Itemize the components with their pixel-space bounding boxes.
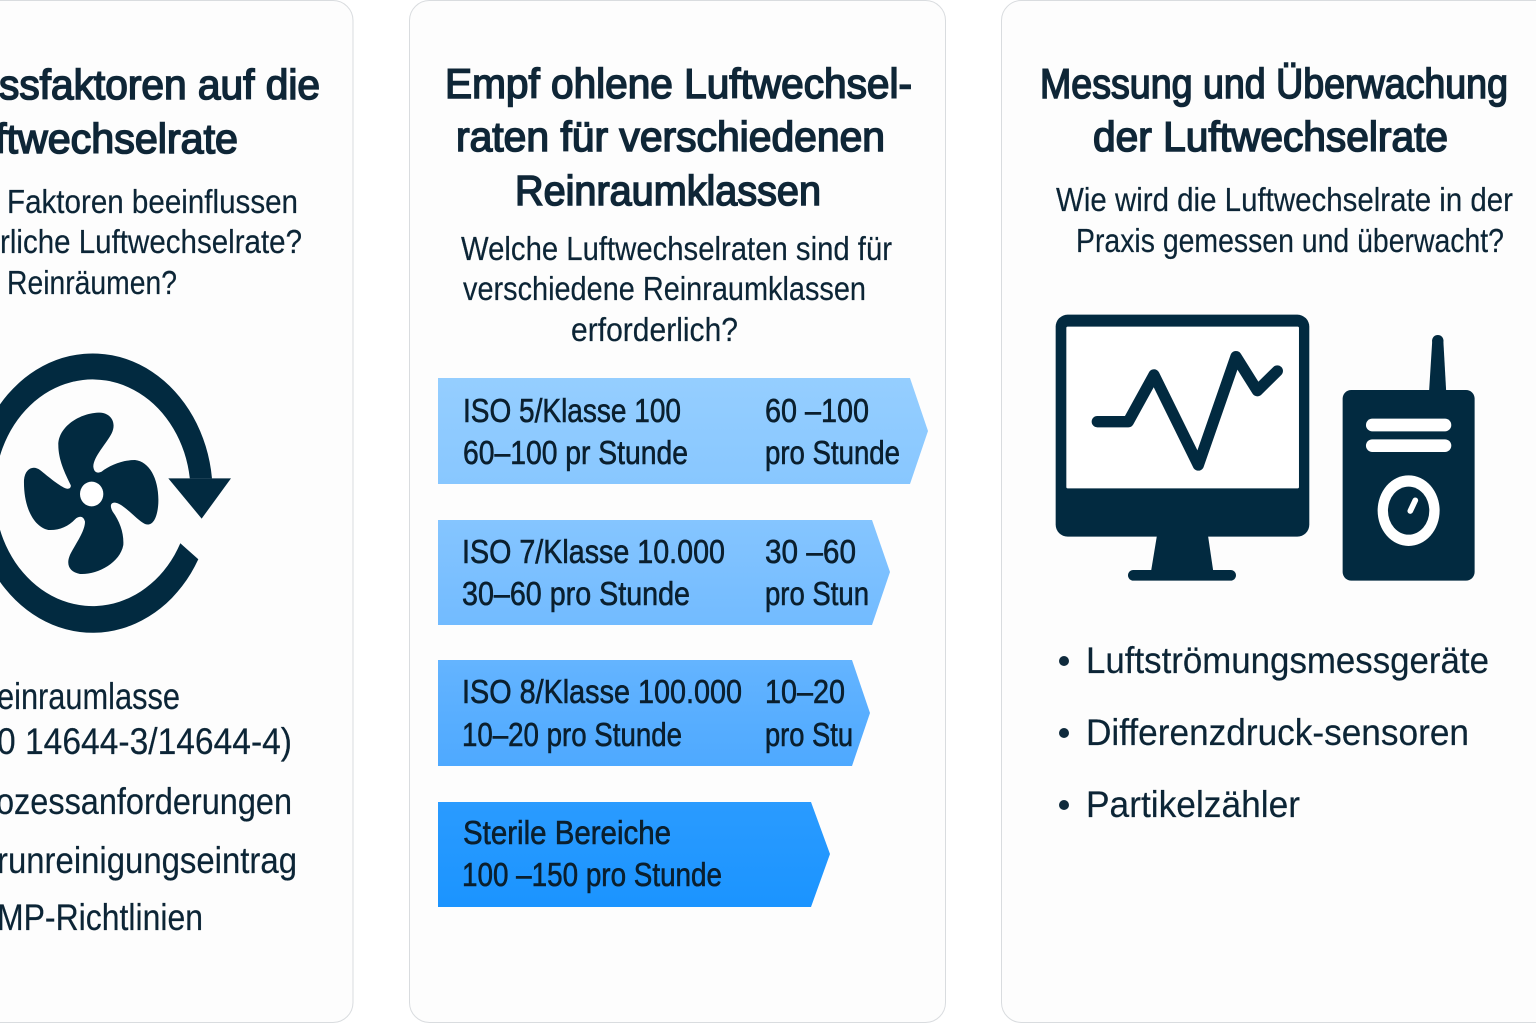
panel: Messung und Überwachung [1002,0,1536,1022]
factor list: MP-Richtlinien [0,897,203,938]
heading: Empfohlene Luftwechselraten: Empf ohlene Luftwechsel- [445,60,912,107]
arrow bar: ISO 5: ISO 5/Klasse 100 [463,392,681,429]
arrow bar: ISO 5: 60–100 pr Stunde [463,434,688,471]
measurement device list: Luftströmungsmessgeräte [1086,640,1489,681]
question text: rliche Luftwechselrate? [0,223,302,260]
question text [461,230,892,348]
factor list: 0 14644-3/14644-4) [0,721,292,762]
heading: Empfohlene Luftwechselraten [445,60,912,214]
heading: Empfohlene Luftwechselraten: Reinraumklassen [515,167,821,214]
question text: Welche Luftwechselraten sind für [461,230,892,267]
icon: monitor with trend line [1056,315,1309,581]
arrow bar: ISO 8: 10–20 [765,673,845,710]
arrow bar: sterile Bereiche: Sterile Bereiche [463,814,671,851]
question text: Reinräumen? [7,264,177,301]
arrow bar: sterile Bereiche [438,802,830,907]
arrow bar: ISO 8: ISO 8/Klasse 100.000 [462,673,742,710]
arrow bar: sterile Bereiche: 100 –150 pro Stunde [462,856,722,893]
icon: fan with circular arrow [0,353,231,633]
heading: Empfohlene Luftwechselraten: raten für verschiedenen [456,113,885,160]
panel: Empfohlene Luftwechselraten [410,0,946,1022]
arrow bar: ISO 5: pro Stunde [765,434,900,471]
arrow bar: ISO 7: 30–60 pro Stunde [462,575,690,612]
question text: verschiedene Reinraumklassen [463,270,866,307]
question text [0,183,302,301]
factor list: einraumlasse [0,676,180,717]
heading: Messung und Überwachung: der Luftwechselrate [1093,113,1448,160]
heading: Einflussfaktoren: ftwechselrate [0,115,238,162]
arrow bar: ISO 7: ISO 7/Klasse 10.000 [462,533,725,570]
panel: Einflussfaktoren [0,0,353,1022]
arrow bar: ISO 7: 30 –60 [765,533,856,570]
measurement device list: Differenzdruck-sensoren [1086,712,1469,753]
heading: Messung und Überwachung [1040,60,1508,160]
factor list: ozessanforderungen [0,781,292,822]
question text: erforderlich? [571,311,738,348]
arrow bar: ISO 5: 60 –100 [765,392,869,429]
heading: Einflussfaktoren [0,61,320,162]
measurement device list [1059,640,1489,825]
question text [1056,181,1513,259]
factor list: runreinigungseintrag [0,840,297,881]
heading: Einflussfaktoren: ssfaktoren auf die [0,61,320,108]
arrow bar: ISO 8 [438,660,870,766]
question text: Faktoren beeinflussen [7,183,298,220]
arrow bar: ISO 5 [438,378,928,484]
factor list [0,676,297,938]
arrow bar: ISO 8: 10–20 pro Stunde [462,716,682,753]
arrow bar: ISO 7 [438,520,890,625]
measurement device list: Partikelzähler [1086,784,1300,825]
arrow bar: ISO 7: pro Stun [765,575,869,612]
arrow bar: ISO 8: pro Stu [765,716,853,753]
icon: handheld measuring device [1343,335,1475,581]
